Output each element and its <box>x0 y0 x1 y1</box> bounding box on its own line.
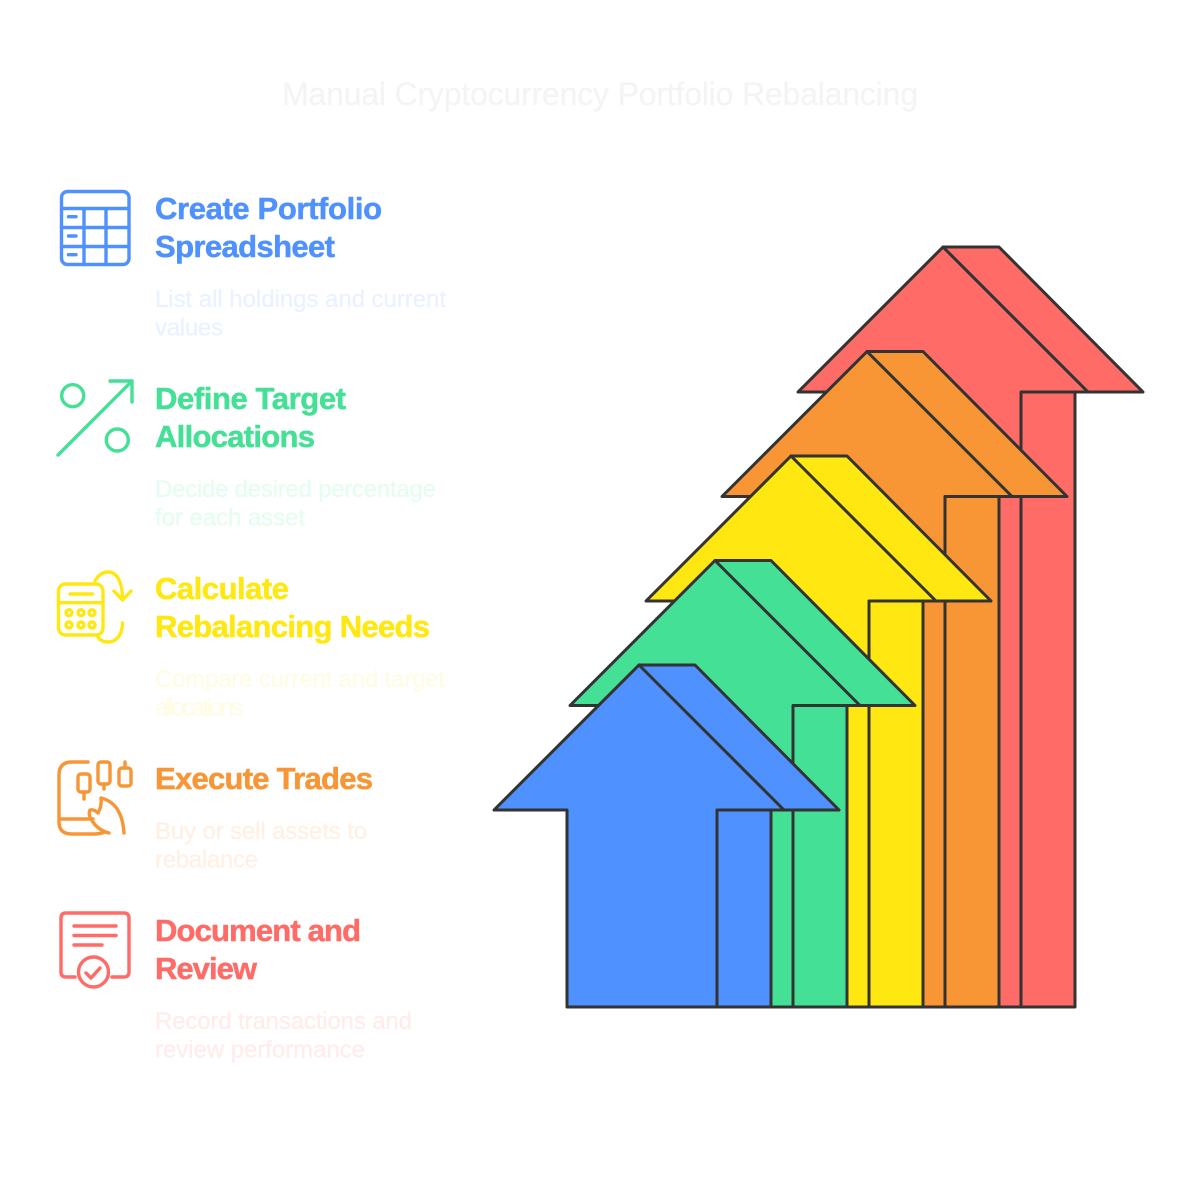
arrow: orange <box>722 352 1067 1007</box>
heading: define target allocations: Define Target <box>155 381 346 416</box>
icon: percent arrow <box>58 381 132 455</box>
icon: document with check <box>61 913 129 987</box>
description: calculate rebalancing needs: Compare current and target <box>155 666 445 693</box>
heading: calculate rebalancing needs: Rebalancing Needs <box>155 609 430 644</box>
heading: document and review: Document and <box>155 913 361 948</box>
heading: create portfolio spreadsheet: Create Portfolio <box>155 191 382 226</box>
step 1: create portfolio spreadsheet <box>62 191 446 342</box>
step 4: execute trades <box>59 761 373 874</box>
description: execute trades: Buy or sell assets to <box>155 818 367 845</box>
description: document and review: review performance <box>155 1036 365 1064</box>
description: define target allocations: for each asset <box>155 504 305 532</box>
chart: stacked rising arrows <box>494 247 1143 1007</box>
description: define target allocations: Decide desired percentage <box>155 476 436 503</box>
arrow: yellow <box>646 456 991 1007</box>
description: document and review: Record transactions and <box>155 1008 412 1035</box>
step 5: document and review <box>61 913 412 1064</box>
heading: calculate rebalancing needs: Calculate <box>155 571 289 606</box>
arrow: green <box>570 560 915 1007</box>
description: create portfolio spreadsheet: values <box>155 314 223 342</box>
title: Manual Cryptocurrency Portfolio Rebalancing <box>282 76 918 112</box>
icon: calculator with cycle arrows <box>58 572 131 642</box>
description: create portfolio spreadsheet: List all holdings and current <box>155 286 446 313</box>
description: calculate rebalancing needs: allocations <box>155 694 243 722</box>
heading: document and review: Review <box>155 951 258 986</box>
heading: define target allocations: Allocations <box>155 419 315 454</box>
arrow: blue <box>494 665 839 1007</box>
icon: spreadsheet <box>62 192 129 264</box>
heading: execute trades: Execute Trades <box>155 761 373 796</box>
description: execute trades: rebalance <box>155 846 258 874</box>
heading: create portfolio spreadsheet: Spreadsheet <box>155 229 335 264</box>
icon: trading phone with hand <box>59 762 131 834</box>
step 3: calculate rebalancing needs <box>58 571 445 722</box>
step 2: define target allocations <box>58 381 436 532</box>
arrow: red <box>798 247 1143 1007</box>
